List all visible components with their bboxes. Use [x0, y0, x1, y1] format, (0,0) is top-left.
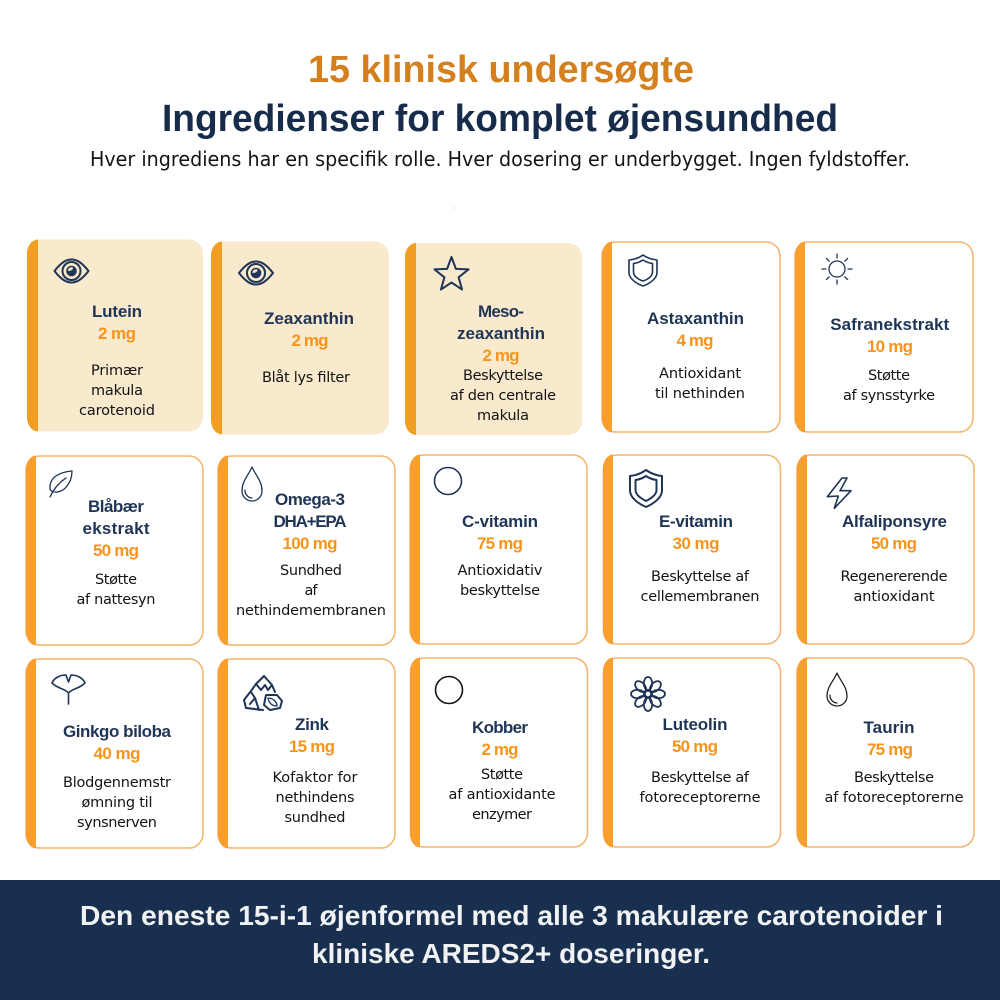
card: C-vitamin: 75 mg	[477, 534, 523, 553]
icon: circle	[436, 676, 462, 704]
icon: drop	[242, 467, 262, 501]
icon: circle	[434, 468, 462, 494]
card: Omega-3: 100 mg	[282, 534, 338, 553]
card: Lutein	[27, 240, 203, 432]
description: af fotoreceptorerne	[824, 790, 964, 806]
description: Antioxidativ	[458, 563, 543, 579]
card: Omega-3: Omega-3	[275, 490, 345, 509]
description: Regenererende	[840, 569, 948, 585]
icon: eye	[239, 262, 273, 284]
description: Støtte	[481, 767, 523, 783]
card: Kobber: Kobber	[472, 718, 528, 737]
card: Zeaxanthin	[211, 242, 389, 434]
card: E-vitamin: E-vitamin	[659, 512, 733, 531]
description	[458, 563, 543, 599]
card: Zink: 15 mg	[289, 737, 335, 756]
description	[76, 572, 156, 608]
description: af nattesyn	[76, 592, 156, 608]
card: Kobber: 2 mg	[482, 740, 518, 759]
icon: leaf	[50, 471, 72, 497]
description: Beskyttelse af	[651, 569, 750, 585]
icon: sun	[822, 254, 852, 284]
card: Luteolin: Luteolin	[662, 715, 728, 734]
card: Ginkgo biloba: Ginkgo biloba	[63, 722, 172, 741]
description: nethindens	[276, 790, 354, 806]
description: Beskyttelse af	[651, 770, 750, 786]
description: sundhed	[284, 810, 346, 826]
card: Safranekstrakt	[795, 242, 973, 432]
description: Blodgennemstr	[63, 775, 171, 791]
icon: ginkgo leaf	[52, 675, 85, 704]
description: cellemembranen	[640, 589, 760, 605]
description	[840, 569, 948, 605]
card: Blåbær ekstrakt	[26, 456, 203, 646]
description: antioxidant	[854, 589, 935, 605]
description	[63, 775, 171, 831]
icon: shield	[630, 470, 662, 507]
card: Meso-zeaxanthin: zeaxanthin	[457, 324, 545, 343]
description	[448, 767, 556, 823]
card: Meso-zeaxanthin: Meso-	[478, 302, 524, 321]
card: Alfaliponsyre: 50 mg	[871, 534, 917, 553]
description: enzymer	[472, 807, 532, 823]
description: af den centrale	[450, 388, 556, 404]
footer banner	[0, 880, 1000, 1000]
description: nethindemembranen	[236, 603, 386, 619]
description	[824, 770, 964, 806]
description: ømning til	[82, 795, 152, 811]
card: Lutein: 2 mg	[98, 324, 136, 343]
card: Safranekstrakt: Safranekstrakt	[830, 315, 950, 334]
icon: flower	[631, 677, 665, 711]
description: til nethinden	[655, 386, 745, 402]
description: Støtte	[95, 572, 137, 588]
icon: star	[434, 257, 469, 290]
description: synsnerven	[77, 815, 157, 831]
description: beskyttelse	[460, 583, 540, 599]
card: Astaxanthin: 4 mg	[676, 331, 714, 350]
card: Blåbær ekstrakt: ekstrakt	[82, 519, 150, 538]
description: Antioxidant	[659, 366, 741, 382]
card: Blåbær ekstrakt: 50 mg	[93, 541, 139, 560]
title: 15 klinisk undersøgte	[308, 49, 694, 91]
icon: drop	[827, 673, 847, 706]
description	[236, 563, 386, 619]
footer banner: Den eneste 15-i-1 øjenformel med alle 3 makulære carotenoider i	[80, 900, 943, 931]
card: Lutein: Lutein	[92, 302, 142, 321]
title: Ingredienser for komplet øjensundhed	[162, 98, 838, 140]
description	[450, 368, 556, 424]
footer banner: kliniske AREDS2+ doseringer.	[312, 938, 710, 969]
description: Beskyttelse	[463, 368, 543, 384]
card: Astaxanthin: Astaxanthin	[647, 309, 744, 328]
icon: mineral rock with leaf	[244, 676, 282, 710]
icon: eye	[54, 260, 88, 282]
card: Meso-zeaxanthin	[405, 243, 582, 435]
description: Blåt lys filter	[262, 369, 350, 386]
description	[843, 368, 935, 404]
card: E-vitamin: 30 mg	[672, 534, 720, 553]
description	[79, 363, 155, 419]
description	[272, 770, 358, 826]
description: carotenoid	[79, 403, 155, 419]
icon: lightning bolt	[827, 478, 851, 508]
subtitle: Hver ingrediens har en specifik rolle. Hver dosering er underbygget. Ingen fyldstoffer.	[90, 147, 910, 171]
title	[162, 49, 838, 140]
description: af	[304, 583, 318, 599]
description	[655, 366, 745, 402]
card: Taurin: 75 mg	[867, 740, 913, 759]
icon: shield	[629, 255, 657, 286]
card: Taurin: Taurin	[864, 718, 914, 737]
card: Blåbær ekstrakt: Blåbær	[88, 497, 144, 516]
card: Taurin	[797, 658, 974, 848]
card: C-vitamin	[410, 454, 587, 644]
card: Ginkgo biloba: 40 mg	[94, 744, 140, 763]
card: Alfaliponsyre: Alfaliponsyre	[842, 512, 947, 531]
description: Støtte	[868, 368, 910, 384]
card: Omega-3	[218, 456, 395, 646]
description: Primær	[91, 363, 143, 379]
card: Zink	[218, 658, 395, 848]
description: af synsstyrke	[843, 388, 935, 404]
description: makula	[477, 408, 529, 424]
card: Zeaxanthin: Zeaxanthin	[264, 309, 354, 328]
description	[640, 569, 760, 605]
card: E-vitamin	[603, 454, 780, 644]
description: Beskyttelse	[854, 770, 934, 786]
card: Ginkgo biloba	[26, 658, 203, 848]
card: Zeaxanthin: 2 mg	[292, 331, 328, 350]
card: Astaxanthin	[602, 242, 780, 432]
card: Kobber	[410, 658, 588, 848]
description: Sundhed	[280, 563, 342, 579]
card: Alfaliponsyre	[797, 454, 974, 644]
description: af antioxidante	[448, 787, 556, 803]
card: Luteolin	[603, 658, 780, 848]
description: Kofaktor for	[272, 770, 358, 786]
description: makula	[91, 383, 143, 399]
card: Zink: Zink	[295, 715, 330, 734]
card: Luteolin: 50 mg	[672, 737, 718, 756]
card: C-vitamin: C-vitamin	[462, 512, 538, 531]
description	[640, 770, 761, 806]
card: Meso-zeaxanthin: 2 mg	[482, 346, 520, 365]
card: Omega-3: DHA+EPA	[274, 512, 346, 531]
description: fotoreceptorerne	[640, 790, 761, 806]
card: Safranekstrakt: 10 mg	[867, 337, 913, 356]
